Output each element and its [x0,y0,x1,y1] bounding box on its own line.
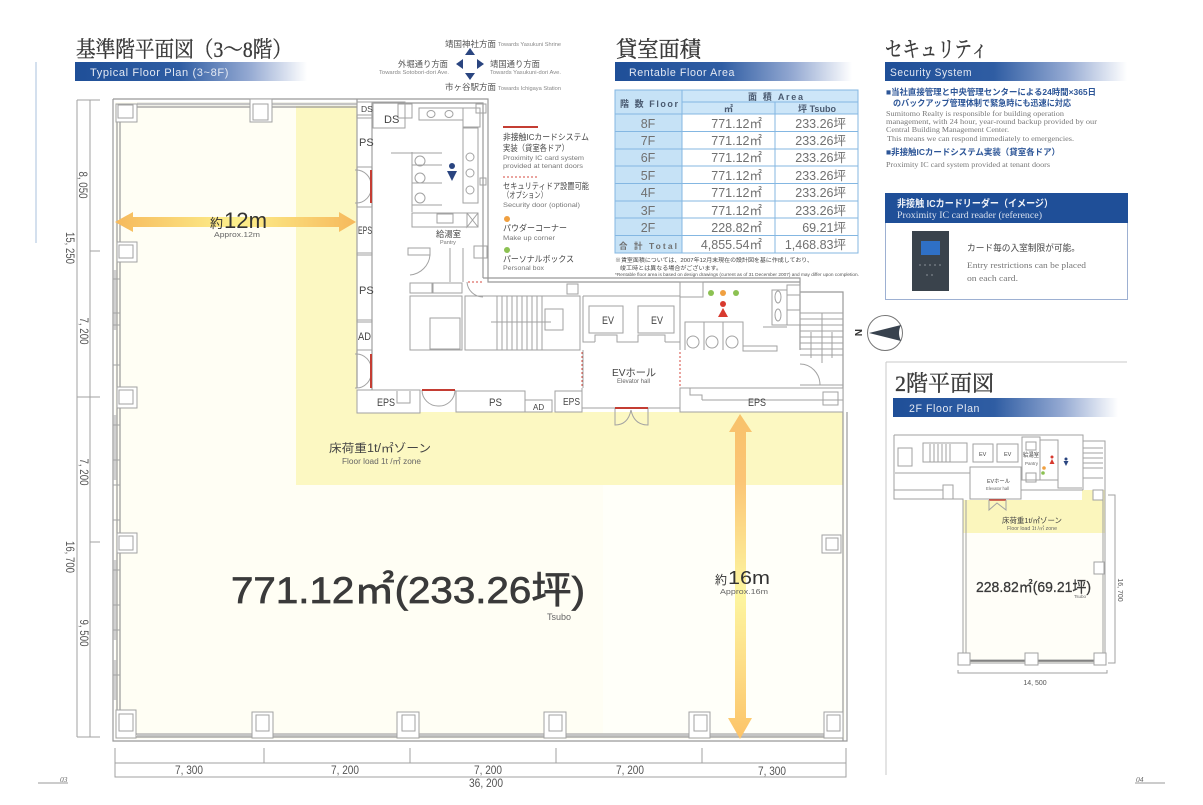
dimensions: 2F: 16, 700 [1116,578,1123,602]
legend: 実装（貸室各ドア） [503,143,569,153]
table: rentable floor area: 233.26坪 [795,151,846,165]
panel: IC card reader [885,193,1128,300]
text block: security description: This means we can respond immediately to emergencies. [887,134,1074,143]
direction compass labels [379,39,561,92]
room labels: EV [651,315,664,327]
arrow: approx 16m depth: Approx.16m [720,589,768,596]
table: rentable floor area: 233.26坪 [795,169,846,183]
2F room labels: EV [1004,452,1012,458]
table footnote: *Rentable floor area is based on design drawings (current as of 31 December 2007) and may differ upon completion. [615,272,859,277]
page number 03: 03 [60,775,68,784]
floor load zone label: Floor load 1t /㎡ zone [342,457,422,466]
building core [355,99,843,425]
panel: IC card reader: on each card. [967,273,1018,283]
floor plan: 2F: 床荷重1t/㎡ゾーン [1002,515,1062,525]
room labels: AD [358,331,371,343]
icon: restroom symbols and markers [447,163,739,317]
direction compass labels: 市ヶ谷駅方面 [445,82,496,92]
2F room labels: Elevator hall [986,486,1009,491]
table: rentable floor area: 4F [641,186,656,200]
table: rentable floor area: 8F [641,117,656,131]
arrow: approx 12m depth [115,208,356,239]
page number 04 [1135,775,1165,784]
table footnote: 竣工時とは異なる場合がございます。 [620,264,722,272]
legend: 非接触ICカードシステム [503,132,589,142]
dimensions: bottom [115,748,846,790]
heading: 2F floor plan: 2階平面図 [895,371,994,396]
table footnote: ※賃室面積については、2007年12月末現在の設計図を基に作成しており、 [615,256,813,264]
dimensions: bottom: 7, 300 [175,763,203,777]
table: rentable floor area: 2F [641,221,656,235]
table: rentable floor area: 233.26坪 [795,134,846,148]
legend: Proximity IC card system [503,155,584,162]
floor plan: 2F [894,435,1106,665]
text block: security description: Proximity IC card system provided at tenant doors [886,160,1050,169]
floor area figure: Tsubo [547,612,571,622]
table: rentable floor area: 5F [641,169,656,183]
arrow: approx 16m depth: 16m [728,567,770,588]
panel: IC card reader: カード毎の入室制限が可能。 [967,242,1080,253]
panel: IC card reader: Proximity IC card reader (reference) [897,210,1042,221]
legend: provided at tenant doors [503,163,584,170]
table: rentable floor area: 233.26坪 [795,117,846,131]
room labels: AD [533,403,544,412]
text block: security description [886,86,1098,169]
room labels: 給湯室 [436,229,461,239]
table: rentable floor area: 228.82㎡ [711,221,762,235]
direction compass labels: Towards Yasukuni-dori Ave. [490,70,561,76]
legend: パウダーコーナー [503,223,567,233]
heading: rentable floor area: 貸室面積 [616,37,703,62]
floor plan: 2F: Floor load 1t /㎡ zone [1007,525,1057,532]
direction compass labels: 靖国通り方面 [490,59,540,69]
2F room labels: EVホール [987,478,1010,485]
icon: north compass: N [852,329,863,336]
heading: typical floor plan: 基準階平面図（3〜8階） [76,37,292,62]
floor area figure: 771.12㎡(233.26坪) [231,569,585,611]
table: rentable floor area: 階 数 Floor [620,98,678,109]
table footnote [615,256,859,277]
table: rentable floor area: ㎡ [724,104,733,114]
table: rentable floor area [615,90,858,253]
arrow: approx 16m depth: 約 [715,572,727,587]
arrow: approx 12m depth: 12m [224,208,267,233]
room labels: EVホール [612,367,656,379]
dimensions: bottom: 36, 200 [469,776,503,790]
arrow: approx 12m depth: Approx.12m [214,232,260,239]
table: rentable floor area: 69.21坪 [802,221,846,235]
dimensions: 2F: 14, 500 [1023,680,1047,687]
direction compass labels: 靖国神社方面 [445,39,496,49]
table: rentable floor area: 面 積 Area [748,91,804,102]
dimensions: bottom: 7, 300 [758,764,786,778]
dimensions: left side: 16, 700 [63,541,77,573]
room labels: Pantry [440,240,456,246]
heading: 2F floor plan [893,371,1118,417]
table: rentable floor area: 771.12㎡ [711,186,762,200]
room labels [358,104,766,412]
room labels: EPS [748,397,766,409]
table: rentable floor area: 771.12㎡ [711,117,762,131]
table: rentable floor area: 合 計 Total [619,241,677,251]
text block: security description: management, with 24 hour, year-round backup provided by our [886,117,1098,126]
table: rentable floor area: 771.12㎡ [711,169,762,183]
floor plan: 2F: Tsubo [1074,594,1087,599]
table: rentable floor area: 4,855.54㎡ [701,238,762,252]
dimensions: bottom: 7, 200 [474,763,502,777]
room labels: EV [602,315,615,327]
table: rentable floor area: 1,468.83坪 [785,238,846,252]
dimensions: left side: 7, 200 [77,318,91,345]
2F room labels [979,451,1039,491]
room labels: Elevator hall [617,379,650,385]
table: rentable floor area: 771.12㎡ [711,134,762,148]
direction compass labels: 外堀通り方面 [398,59,448,69]
2F markers [1041,456,1068,475]
structural columns [116,99,843,738]
icon: card reader device [912,231,949,291]
room labels: PS [489,397,502,409]
heading: security system [885,37,1127,81]
heading: 2F floor plan: 2F Floor Plan [909,403,980,415]
room labels: EPS [358,225,372,237]
legend: セキュリティドア設置可能 [503,181,589,191]
heading: security system: セキュリティ [885,37,988,62]
panel: IC card reader: 非接触 ICカードリーダー（イメージ） [897,197,1053,210]
legend: Personal box [503,265,545,272]
table: rentable floor area: 3F [641,204,656,218]
text block: security description: ■非接触ICカードシステム実装（貸室各ドア） [886,146,1060,157]
table: rentable floor area: 坪 Tsubo [798,103,836,114]
text block: security description: Sumitomo Realty is responsible for building operation [886,109,1064,118]
room labels: PS [359,285,374,297]
legend: Security door (optional) [503,202,580,209]
dimensions: left side: 7, 200 [77,458,91,486]
legend: Make up corner [503,235,556,242]
room labels: PS [359,137,374,149]
text block: security description: ■当社直接管理と中央管理センターによる24時間×365日 [886,86,1096,97]
direction compass labels: Towards Sotobori-dori Ave. [379,70,449,76]
arrow: approx 12m depth: 約 [210,216,223,231]
floor plan: typical floor [113,99,847,741]
room labels: EPS [377,397,395,409]
dimensions: bottom: 7, 200 [616,763,644,777]
table: rentable floor area: 7F [641,134,656,148]
room labels: DS [361,104,373,114]
page number 03 [38,775,68,784]
table: rentable floor area: 771.12㎡ [711,204,762,218]
2F room labels: Pantry [1025,461,1039,466]
2F room labels: 給湯室 [1023,451,1039,459]
heading: typical floor plan: Typical Floor Plan (3~8F) [90,67,229,79]
panel: IC card reader: Entry restrictions can be placed [967,260,1087,270]
legend: パーソナルボックス [503,254,574,264]
dimensions: left side [63,100,100,737]
table: rentable floor area: 233.26坪 [795,186,846,200]
room labels: DS [384,114,399,126]
dimensions: left side: 8, 050 [76,172,90,199]
heading: security system: Security System [890,67,972,79]
legend [503,127,589,272]
heading: rentable floor area [615,37,852,81]
legend: （オプション） [503,190,547,200]
direction compass labels: Towards Yasukuni Shrine [498,42,561,48]
text block: security description: Central Building Management Center. [886,125,1009,134]
floor load zone label [329,441,431,466]
direction compass labels: Towards Ichigaya Station [498,86,561,92]
dimensions: left side: 9, 500 [77,620,91,647]
text block: security description: のバックアップ管理体制で緊急時にも迅速に対応 [893,97,1071,108]
table: rentable floor area: 771.12㎡ [711,151,762,165]
icon: north compass [852,316,902,350]
table: rentable floor area: 6F [641,151,656,165]
room labels: EPS [563,396,580,408]
dimensions: left side: 15, 250 [63,232,77,264]
2F room labels: EV [979,452,987,458]
floor load zone label: 床荷重1t/㎡ゾーン [329,441,431,455]
table: rentable floor area: 233.26坪 [795,204,846,218]
arrow: approx 16m depth [715,414,770,739]
floor plan: 2F: 228.82㎡(69.21坪) [976,579,1091,596]
heading: rentable floor area: Rentable Floor Area [629,67,735,79]
dimensions: bottom: 7, 200 [331,763,359,777]
dimensions: 2F [958,495,1123,687]
page number 04: 04 [1136,775,1144,784]
heading: typical floor plan [75,37,307,81]
